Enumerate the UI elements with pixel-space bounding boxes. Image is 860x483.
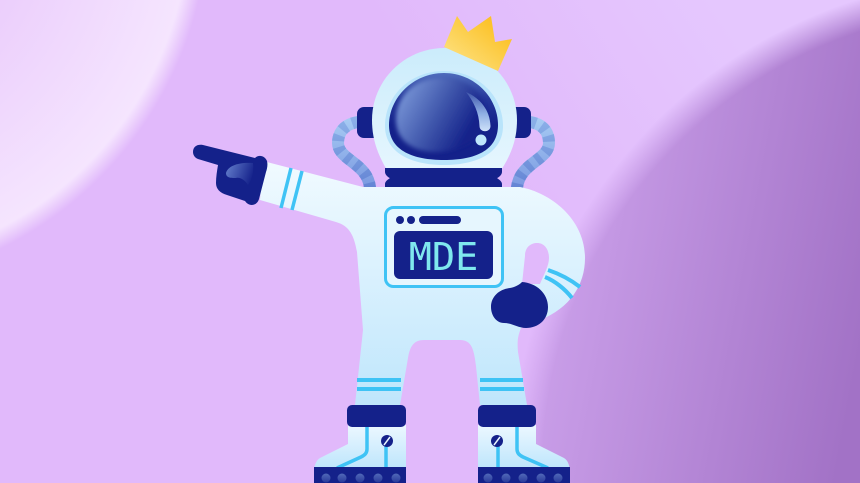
sleeve stripes, right arm <box>545 270 580 298</box>
leg stripes <box>357 378 524 391</box>
chest panel: MDE <box>386 208 502 286</box>
right boot <box>478 405 570 483</box>
helmet <box>372 48 517 172</box>
pointing glove <box>193 145 267 205</box>
suit body with arms and legs <box>260 161 585 405</box>
helmet ear caps <box>357 107 531 138</box>
visor <box>385 71 503 165</box>
left boot <box>314 405 406 483</box>
sleeve stripes, left arm <box>281 168 302 210</box>
collar <box>385 168 502 188</box>
chest panel: MDE: MDE <box>409 235 478 280</box>
hip glove <box>491 282 548 328</box>
air hoses <box>338 122 549 188</box>
icon: crown <box>444 16 512 71</box>
